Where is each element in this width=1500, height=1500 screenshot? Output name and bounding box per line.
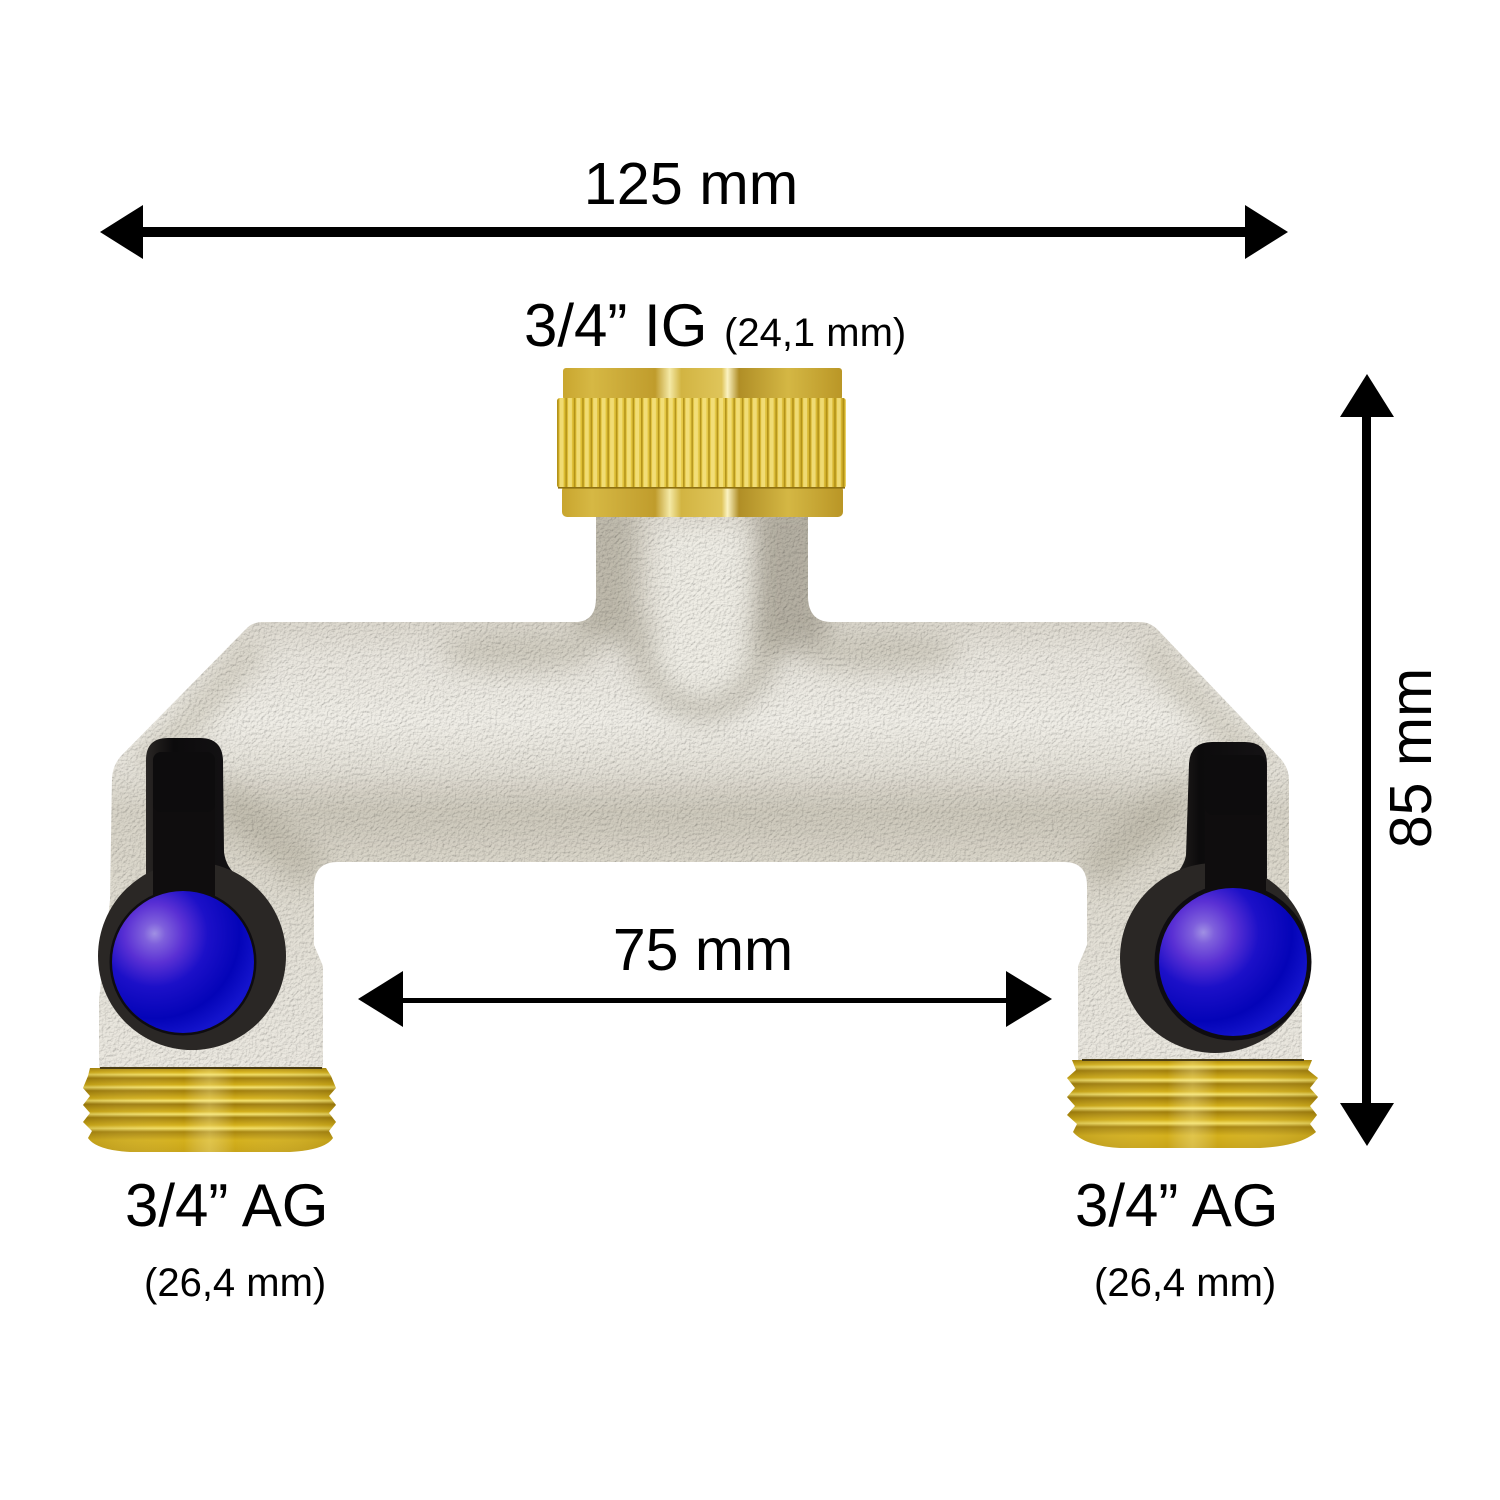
- arrow: outlet spacing: [358, 971, 1052, 1027]
- shut-off valve: right: [1120, 742, 1312, 1053]
- label: top connection size: [524, 292, 906, 359]
- label: right outlet size: [1075, 1172, 1278, 1305]
- height dimension: 85 mm: [1340, 374, 1444, 1146]
- label: 125 mm: 125 mm: [584, 150, 798, 217]
- label: right outlet size: 3/4” AG: [1075, 1172, 1278, 1239]
- shading: stem base and tube: [130, 500, 1280, 890]
- spacing dimension: 75 mm: [358, 917, 1052, 1027]
- width dimension: 125 mm: [100, 150, 1288, 259]
- nut knurled ring: [557, 398, 846, 489]
- label: left outlet size: [125, 1172, 328, 1305]
- label: top connection size: 3/4” IG: [524, 292, 707, 359]
- handle lever: [1170, 742, 1267, 900]
- brass nut: top female connector: [557, 368, 846, 517]
- valve body: [90, 500, 1315, 1080]
- handle disc: [98, 862, 286, 1050]
- handle lever: [146, 738, 238, 900]
- arrow: overall width: [100, 205, 1288, 259]
- label: top connection size: (24,1 mm): [724, 311, 906, 355]
- shut-off valve: left: [98, 738, 286, 1050]
- blue ball: [112, 891, 254, 1033]
- label: 85 mm: 85 mm: [1378, 668, 1444, 848]
- handle disc: [1120, 863, 1310, 1053]
- label: left outlet size: (26,4 mm): [144, 1261, 326, 1305]
- nut upper band: [563, 368, 842, 400]
- arrow: overall height: [1340, 374, 1394, 1146]
- label: 75 mm: 75 mm: [613, 917, 793, 983]
- label: right outlet size: (26,4 mm): [1094, 1261, 1276, 1305]
- brass thread: left male connector: [83, 1067, 336, 1152]
- texture: cast metal grain: [90, 505, 1315, 1080]
- label: left outlet size: 3/4” AG: [125, 1172, 328, 1239]
- nut lower band: [562, 485, 843, 517]
- brass thread: right male connector: [1067, 1059, 1318, 1148]
- blue ball: [1159, 888, 1307, 1036]
